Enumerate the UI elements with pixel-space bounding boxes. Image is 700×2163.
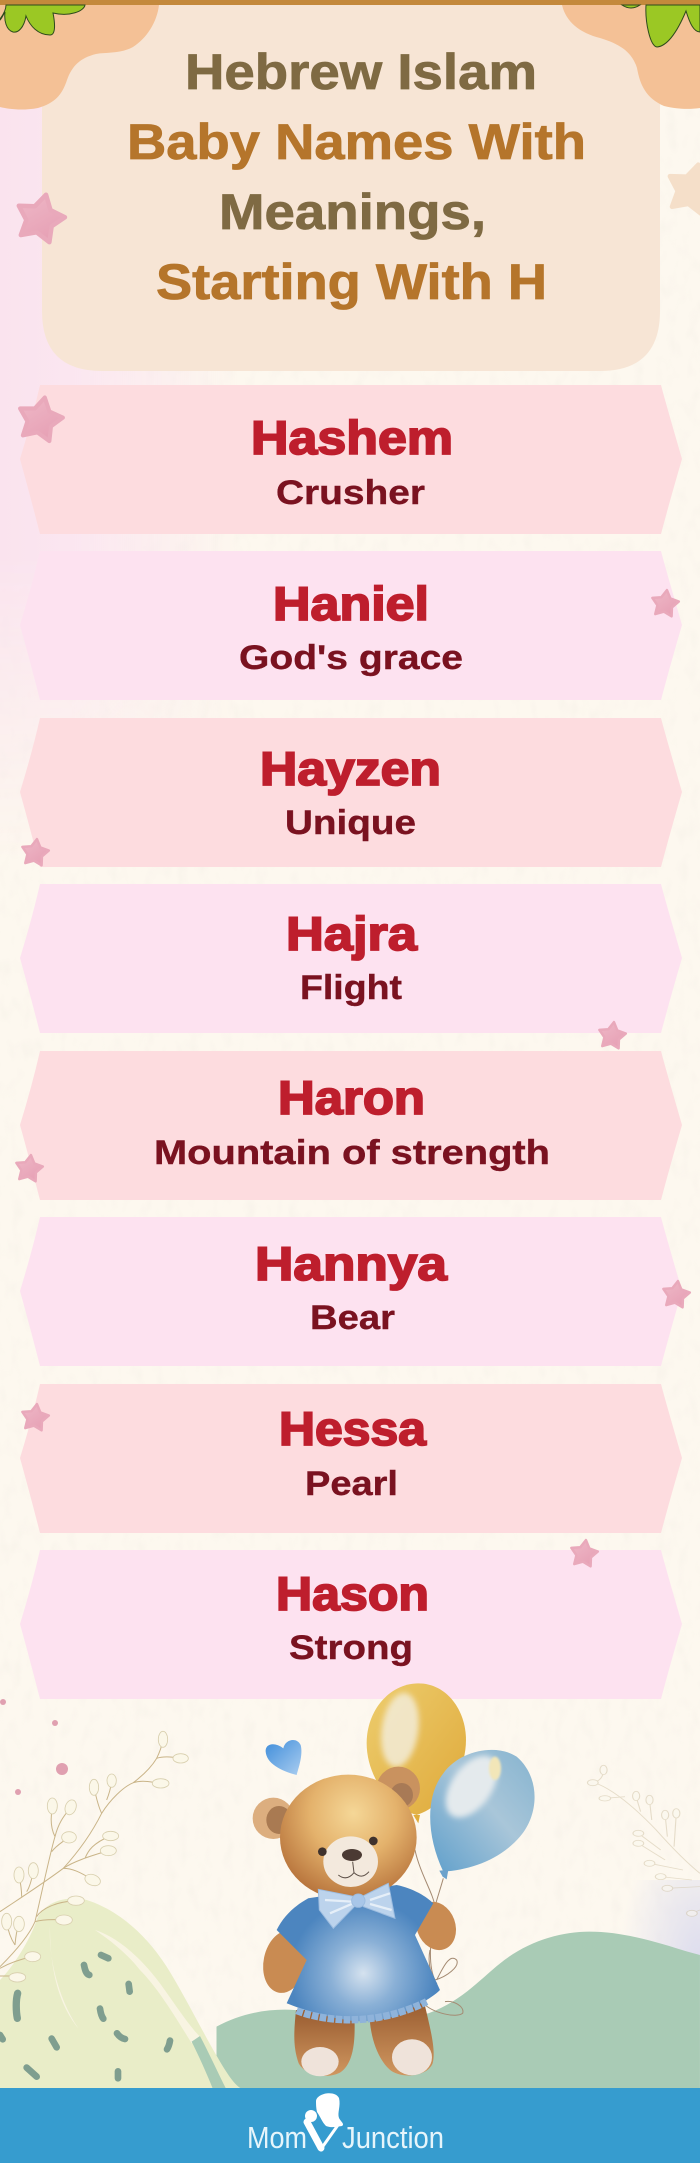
title bbox=[127, 44, 586, 310]
banner: Hayzen: Hayzen bbox=[260, 742, 441, 795]
logo text bbox=[247, 2120, 444, 2155]
green hill bbox=[217, 1932, 700, 2090]
title panel bbox=[42, 5, 660, 371]
bear head bbox=[280, 1775, 417, 1900]
bear legs bbox=[294, 2002, 434, 2076]
icon: blue balloon bbox=[430, 1747, 535, 1879]
corner blob: top right bbox=[562, 5, 700, 109]
icon: mother and child silhouette bbox=[305, 2093, 343, 2149]
branch left bbox=[0, 1731, 188, 1982]
banner: Hessa bbox=[20, 1384, 682, 1533]
top bar bbox=[0, 0, 700, 5]
banner: Hannya bbox=[20, 1217, 682, 1366]
banner: Haniel: God's grace bbox=[239, 639, 463, 677]
icon: green leaf top left bbox=[0, 5, 85, 35]
banner: Haniel: Haniel bbox=[273, 577, 429, 630]
banner: Hayzen bbox=[20, 718, 682, 867]
branch right bbox=[587, 1765, 700, 1916]
bear arms bbox=[258, 1896, 463, 1997]
banner: Haron bbox=[20, 1051, 682, 1200]
title: Meanings, bbox=[219, 184, 486, 240]
MomJunction logo bbox=[247, 2093, 444, 2155]
icon: green leaf top right bbox=[622, 5, 700, 47]
banner: Hessa: Hessa bbox=[279, 1402, 427, 1455]
banner: Hannya: Bear bbox=[310, 1299, 395, 1337]
pink dots bbox=[0, 1699, 68, 1795]
teddy bear with balloons bbox=[253, 1683, 535, 2076]
banner: Hashem: Crusher bbox=[276, 474, 425, 512]
banner: Hason bbox=[20, 1550, 682, 1699]
banner: Haron: Haron bbox=[278, 1071, 425, 1124]
yellow hill with dashes bbox=[0, 1899, 246, 2090]
banner: Hajra: Hajra bbox=[286, 907, 418, 960]
icon: blue heart bbox=[266, 1740, 301, 1775]
title: Hebrew Islam bbox=[185, 44, 537, 100]
banner: Hashem bbox=[20, 385, 682, 534]
banner: Haron: Mountain of strength bbox=[154, 1134, 550, 1172]
title: Baby Names With bbox=[127, 114, 586, 170]
corner blob: top left bbox=[0, 5, 159, 110]
banner: Hessa: Pearl bbox=[305, 1465, 398, 1503]
bow tie bbox=[318, 1883, 395, 1928]
banner: Hajra bbox=[20, 884, 682, 1033]
bear ears bbox=[253, 1767, 420, 1839]
logo text: Junction bbox=[342, 2120, 444, 2155]
icon: yellow balloon bbox=[367, 1683, 466, 1823]
banner: Hason: Strong bbox=[289, 1629, 413, 1667]
banner: Hashem: Hashem bbox=[251, 411, 453, 464]
title: Starting With H bbox=[156, 254, 547, 310]
banner: Hason: Hason bbox=[276, 1567, 429, 1620]
logo text: Mom bbox=[247, 2120, 307, 2155]
balloon strings bbox=[415, 1850, 463, 2015]
footer bar bbox=[0, 2088, 700, 2163]
banner: Hannya: Hannya bbox=[255, 1237, 448, 1290]
banner: Hajra: Flight bbox=[300, 969, 402, 1007]
banner: Hayzen: Unique bbox=[285, 804, 416, 842]
decorative stars bbox=[12, 159, 700, 1567]
banner: Haniel bbox=[20, 551, 682, 700]
bear dress bbox=[277, 1885, 440, 2021]
